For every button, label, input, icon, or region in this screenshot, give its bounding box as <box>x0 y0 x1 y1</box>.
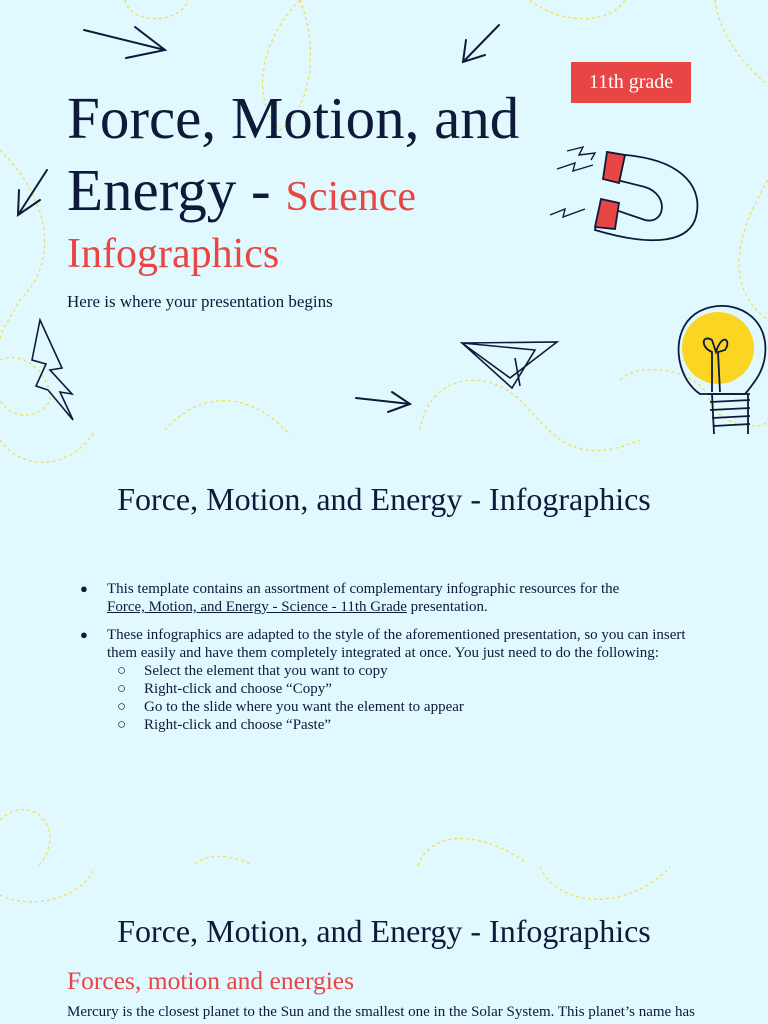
text block: instructions: ○ <box>117 699 126 715</box>
heading: section 3: Force, Motion, and Energy - Infographics <box>117 913 651 949</box>
text block: instructions: ○ <box>117 717 126 733</box>
text block: instructions: These infographics are adapted to the style of the aforementioned presentation, so you can insert <box>107 627 686 643</box>
text block: instructions: Force, Motion, and Energy - Science - 11th Grade presentation. <box>107 599 488 615</box>
text block: instructions: Right-click and choose “Paste” <box>144 717 331 733</box>
text block: instructions: Go to the slide where you want the element to appear <box>144 699 464 715</box>
text block: instructions: them easily and have them completely integrated at once. You just need to do the following: <box>107 645 659 661</box>
subtitle: Here is where your presentation begins <box>67 292 333 311</box>
text block: instructions: Right-click and choose “Copy” <box>144 681 332 697</box>
icon: lightning bolt <box>31 318 74 420</box>
icon: light bulb <box>678 305 766 434</box>
text block: instructions <box>80 581 686 733</box>
title: Energy - Science <box>67 157 416 223</box>
heading: section 2: Force, Motion, and Energy - Infographics <box>117 481 651 517</box>
body text: Mercury is the closest planet to the Sun and the smallest one in the Solar System. This planet’s name has <box>67 1004 695 1020</box>
icon: paper plane <box>460 341 560 390</box>
text block: instructions: ○ <box>117 681 126 697</box>
badge: 11th grade <box>571 62 691 103</box>
text block: instructions: Select the element that you want to copy <box>144 663 388 679</box>
subheading: Forces, motion and energies <box>67 966 354 995</box>
text block: instructions: This template contains an assortment of complementary infographic resources for the <box>107 581 619 597</box>
badge: 11th grade: 11th grade <box>589 71 673 93</box>
icon: magnet <box>550 146 698 242</box>
text block: instructions: ● <box>80 581 88 596</box>
text block: instructions: ○ <box>117 663 126 679</box>
title <box>67 85 519 277</box>
icon: arrows <box>16 24 500 413</box>
title: Force, Motion, and <box>67 85 519 151</box>
text block: instructions: ● <box>80 627 88 642</box>
title: Infographics <box>67 231 279 277</box>
